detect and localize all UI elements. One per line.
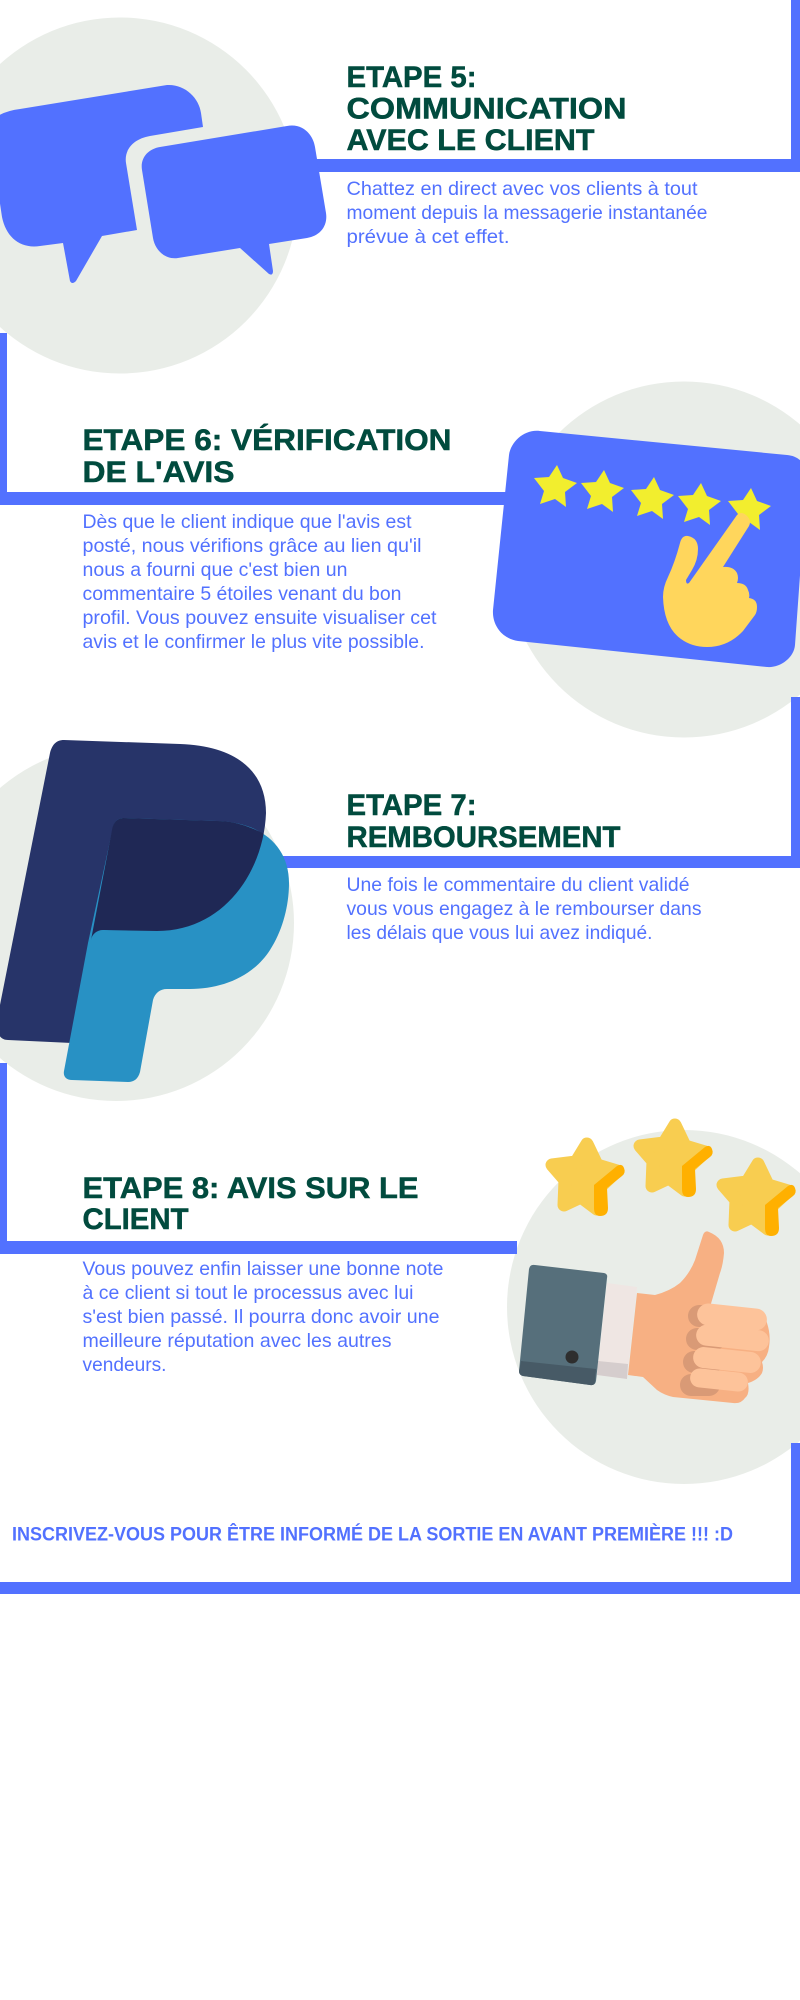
icon: PayPal logo bbox=[0, 740, 289, 1082]
text: step 8 description: s'est bien passé. Il pourra donc avoir une bbox=[82, 1306, 440, 1328]
frame: step 7 connector bbox=[270, 697, 800, 868]
stars bbox=[534, 465, 771, 530]
light P bbox=[64, 818, 289, 1082]
frame: step 5 connector bbox=[300, 0, 800, 172]
circle backdrop: step 8 bbox=[507, 1130, 800, 1484]
text: step 8 description bbox=[82, 1258, 444, 1376]
chat bubble right bbox=[142, 126, 326, 275]
text: step 6 description: avis et le confirmer le plus vite possible. bbox=[82, 631, 424, 653]
circle backdrop: step 7 bbox=[0, 745, 294, 1101]
hand bbox=[663, 513, 757, 647]
heading: step 6: DE L'AVIS bbox=[82, 456, 234, 489]
icon: three gold stars bbox=[552, 1125, 796, 1236]
text: step 7 description: Une fois le commentaire du client validé bbox=[346, 874, 690, 896]
hand and thumb bbox=[628, 1231, 770, 1403]
shirt cuff shade bbox=[597, 1361, 628, 1379]
text: step 5 description: prévue à cet effet. bbox=[346, 226, 510, 248]
text: step 8 description: meilleure réputation avec les autres bbox=[82, 1330, 392, 1352]
heading: step 8: ETAPE 8: AVIS SUR LE bbox=[82, 1172, 418, 1205]
text: step 7 description bbox=[346, 874, 702, 944]
text: step 6 description: profil. Vous pouvez ensuite visualiser cet bbox=[82, 607, 437, 629]
icon: rating card with hand bbox=[493, 431, 800, 667]
text: step 6 description: commentaire 5 étoiles venant du bon bbox=[82, 583, 402, 605]
text: step 6 description bbox=[82, 511, 437, 653]
frame: step 6 connector bbox=[0, 333, 520, 505]
circle backdrop: step 6 bbox=[506, 382, 800, 738]
heading: step 5: ETAPE 5: bbox=[346, 61, 476, 94]
icon: chat bubbles bbox=[0, 85, 326, 283]
fingers bbox=[689, 1302, 770, 1392]
heading: step 7 bbox=[346, 789, 620, 854]
heading: step 8: CLIENT bbox=[82, 1203, 188, 1236]
heading: step 5: AVEC LE CLIENT bbox=[346, 124, 594, 157]
shirt cuff bbox=[597, 1283, 637, 1379]
card bbox=[493, 431, 800, 667]
heading: step 5 bbox=[346, 61, 626, 157]
heading: step 7: REMBOURSEMENT bbox=[346, 821, 620, 854]
text: step 8 description: Vous pouvez enfin laisser une bonne note bbox=[82, 1258, 444, 1280]
heading: step 6: ETAPE 6: VÉRIFICATION bbox=[82, 423, 452, 457]
text: step 8 description: à ce client si tout le processus avec lui bbox=[82, 1282, 414, 1304]
text: step 5 description: moment depuis la messagerie instantanée bbox=[346, 202, 708, 224]
icon: thumbs up bbox=[519, 1231, 770, 1403]
text: step 8 description: vendeurs. bbox=[82, 1354, 166, 1376]
text: step 5 description: Chattez en direct avec vos clients à tout bbox=[346, 178, 698, 200]
sleeve bbox=[519, 1265, 607, 1385]
frame: footer connector bbox=[0, 1443, 800, 1594]
frame: step 8 connector bbox=[0, 1063, 517, 1254]
heading: step 6 bbox=[82, 423, 452, 489]
text: step 7 description: vous vous engagez à le rembourser dans bbox=[346, 898, 702, 920]
heading: step 8 bbox=[82, 1172, 418, 1236]
heading: step 7: ETAPE 7: bbox=[346, 789, 476, 822]
heading: step 5: COMMUNICATION bbox=[346, 92, 626, 126]
text: step 6 description: Dès que le client indique que l'avis est bbox=[82, 511, 412, 533]
text: step 6 description: posté, nous vérifions grâce au lien qu'il bbox=[82, 535, 422, 557]
text: step 7 description: les délais que vous lui avez indiqué. bbox=[346, 922, 652, 944]
dark P bbox=[0, 740, 266, 1043]
text: step 6 description: nous a fourni que c'est bien un bbox=[82, 559, 348, 581]
chat bubble left bbox=[0, 85, 203, 283]
sleeve band bbox=[519, 1361, 596, 1385]
button bbox=[566, 1350, 578, 1364]
text: step 5 description bbox=[346, 178, 708, 248]
finger shadows bbox=[680, 1305, 728, 1396]
overlap of the two P shapes bbox=[91, 818, 264, 940]
circle backdrop: step 5 bbox=[0, 18, 298, 374]
footer call to action: INSCRIVEZ-VOUS POUR ÊTRE INFORMÉ DE LA SORTIE EN AVANT PREMIÈRE !!! :D bbox=[12, 1524, 733, 1546]
